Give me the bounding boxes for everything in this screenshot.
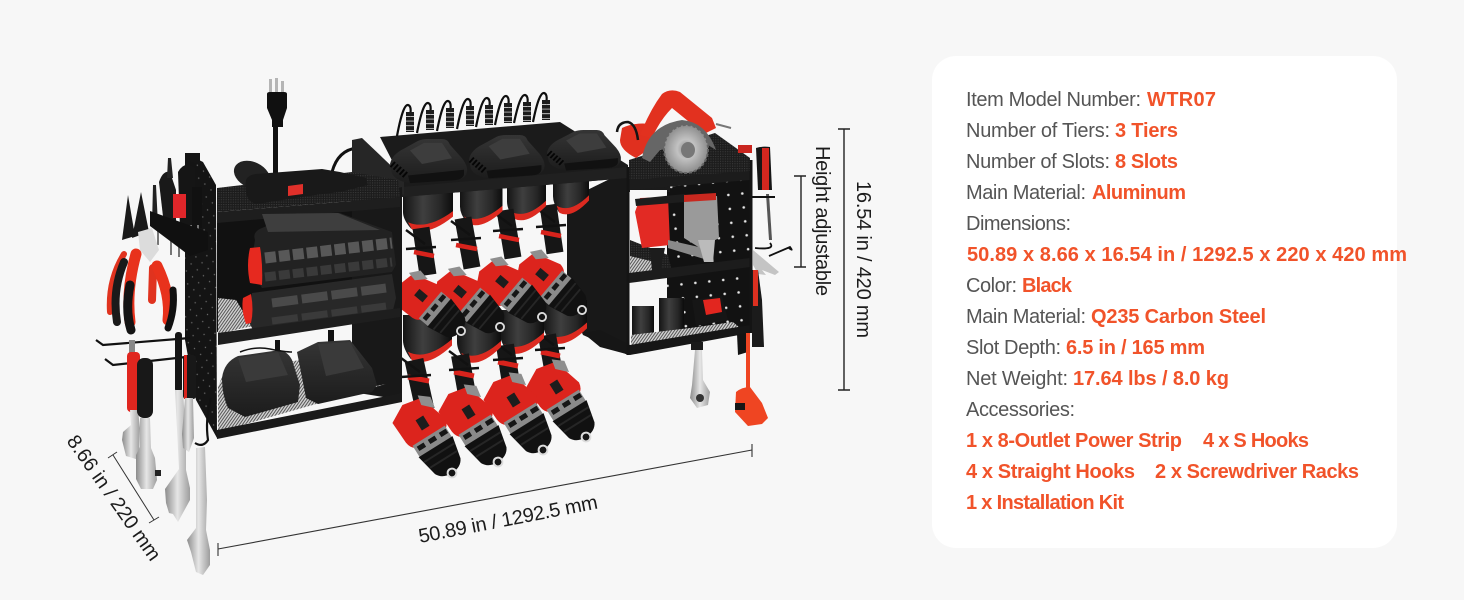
specification text list: Black [1022, 275, 1073, 297]
lower row of drills [387, 300, 608, 489]
product: tool storage rack [96, 78, 792, 575]
specification text list [966, 89, 1407, 514]
adjustable wrench long [165, 332, 190, 522]
specification text list: Accessories: [966, 399, 1075, 421]
specification text list: 17.64 lbs / 8.0 kg [1073, 368, 1229, 390]
upper drill 1 [388, 190, 478, 351]
rear right panel of middle unit [567, 170, 628, 355]
tape measure with red strap [735, 333, 768, 426]
tool rack [150, 211, 208, 256]
straight hooks on pegboard [96, 338, 195, 365]
specification text list: 50.89 x 8.66 x 16.54 in / 1292.5 x 220 x 420 mm [967, 244, 1407, 266]
panel: right unit [583, 133, 751, 355]
panel: left unit [185, 153, 402, 439]
specification text list: Number of Slots: [966, 151, 1110, 173]
interior back [217, 206, 352, 332]
socket wrench with black handle [136, 358, 161, 489]
upper drill 2 [427, 185, 517, 347]
mid mesh [630, 240, 672, 276]
upper drill 3 [469, 180, 559, 337]
lower drill 1 [387, 315, 474, 489]
bottom mesh floor [218, 360, 386, 432]
specification text list: Dimensions: [966, 213, 1071, 235]
dimension: width [218, 444, 752, 556]
specification text list: 4 x Straight Hooks [966, 461, 1135, 483]
panel: middle unit top shelf [352, 122, 628, 197]
right side wall [352, 187, 402, 400]
nail gun [635, 193, 719, 272]
adjustable wrench lower [187, 447, 210, 575]
specification text list: Color: [966, 275, 1017, 297]
dimension: width: 50.89 in / 1292.5 mm [417, 492, 600, 548]
strap hook [737, 333, 748, 355]
top shelf lip [629, 171, 750, 190]
specification text list: 2 x Screwdriver Racks [1155, 461, 1359, 483]
support posts [275, 330, 334, 370]
specification text list: Main Material: [966, 182, 1086, 204]
lower drill 2 [433, 318, 520, 478]
toolbox upper [248, 213, 396, 288]
wrench with red handle [122, 340, 140, 460]
adjustable wrench with red and black handle [182, 355, 196, 452]
specification text list: Aluminum [1092, 182, 1186, 204]
dimension: height adjustable [794, 146, 833, 296]
mesh floor middle [218, 298, 252, 334]
screwdrivers on right side [738, 145, 775, 240]
specification text list: WTR07 [1147, 89, 1216, 111]
ratchet wrench [690, 342, 710, 408]
toolbox lower [242, 274, 396, 336]
left post [626, 167, 630, 355]
dimension: depth: 8.66 in / 220 mm [62, 431, 165, 565]
lower drill 4 [521, 300, 608, 453]
specification text list: Item Model Number: [966, 89, 1141, 111]
upper drill 4 [509, 175, 599, 330]
bottom shelf lip [217, 393, 402, 439]
dimension: overall height: 16.54 in / 420 mm [852, 181, 874, 338]
circular saw [617, 90, 731, 173]
specification text list: 8 Slots [1115, 151, 1178, 173]
upper row of drills [388, 175, 599, 351]
side wall strut [629, 175, 670, 192]
specification text list: Net Weight: [966, 368, 1068, 390]
pliers and screwdriver rack [110, 153, 208, 330]
specification text list: Slot Depth: [966, 337, 1061, 359]
rack top plate [185, 153, 200, 165]
top shelf lip [217, 197, 400, 223]
dimension: height adjustable: Height adjustable [811, 146, 833, 296]
specification text list: Number of Tiers: [966, 120, 1110, 142]
eight-outlet power strip plugs [397, 93, 547, 136]
specification text list: Main Material: [966, 306, 1086, 328]
lower drill 3 [478, 310, 565, 466]
dimension: overall height [838, 129, 874, 390]
middle shelf [629, 258, 750, 283]
top deck [629, 133, 750, 180]
bottom shelf [583, 325, 750, 355]
top deck [217, 172, 400, 212]
cordless screwdriver on top shelf [229, 155, 368, 204]
middle shelf lip [218, 308, 400, 345]
hanging tools [122, 332, 211, 575]
specification text list: Q235 Carbon Steel [1091, 306, 1266, 328]
pliers [110, 192, 173, 330]
panel: specifications card [932, 56, 1407, 548]
bottom mesh floor [631, 322, 740, 346]
charger on bottom shelf left [222, 348, 300, 417]
batteries in bottom bay [632, 296, 728, 340]
icon: power plug and cord [267, 78, 357, 175]
hammer handle [752, 270, 764, 347]
specification text list: 1 x Installation Kit [966, 492, 1124, 514]
charger on bottom shelf right [297, 340, 377, 404]
hook and silver pliers on right side [753, 243, 792, 275]
right post [750, 160, 752, 333]
hook [195, 398, 211, 445]
battery chargers on top shelf [390, 130, 621, 183]
specification text list: 6.5 in / 165 mm [1066, 337, 1205, 359]
pegboard back [667, 178, 750, 340]
specification text list: 3 Tiers [1115, 120, 1178, 142]
specification text list: 4 x S Hooks [1203, 430, 1309, 452]
screwdrivers in rack [159, 172, 176, 225]
specification text list: 1 x 8-Outlet Power Strip [966, 430, 1182, 452]
pegboard left column [185, 153, 217, 438]
